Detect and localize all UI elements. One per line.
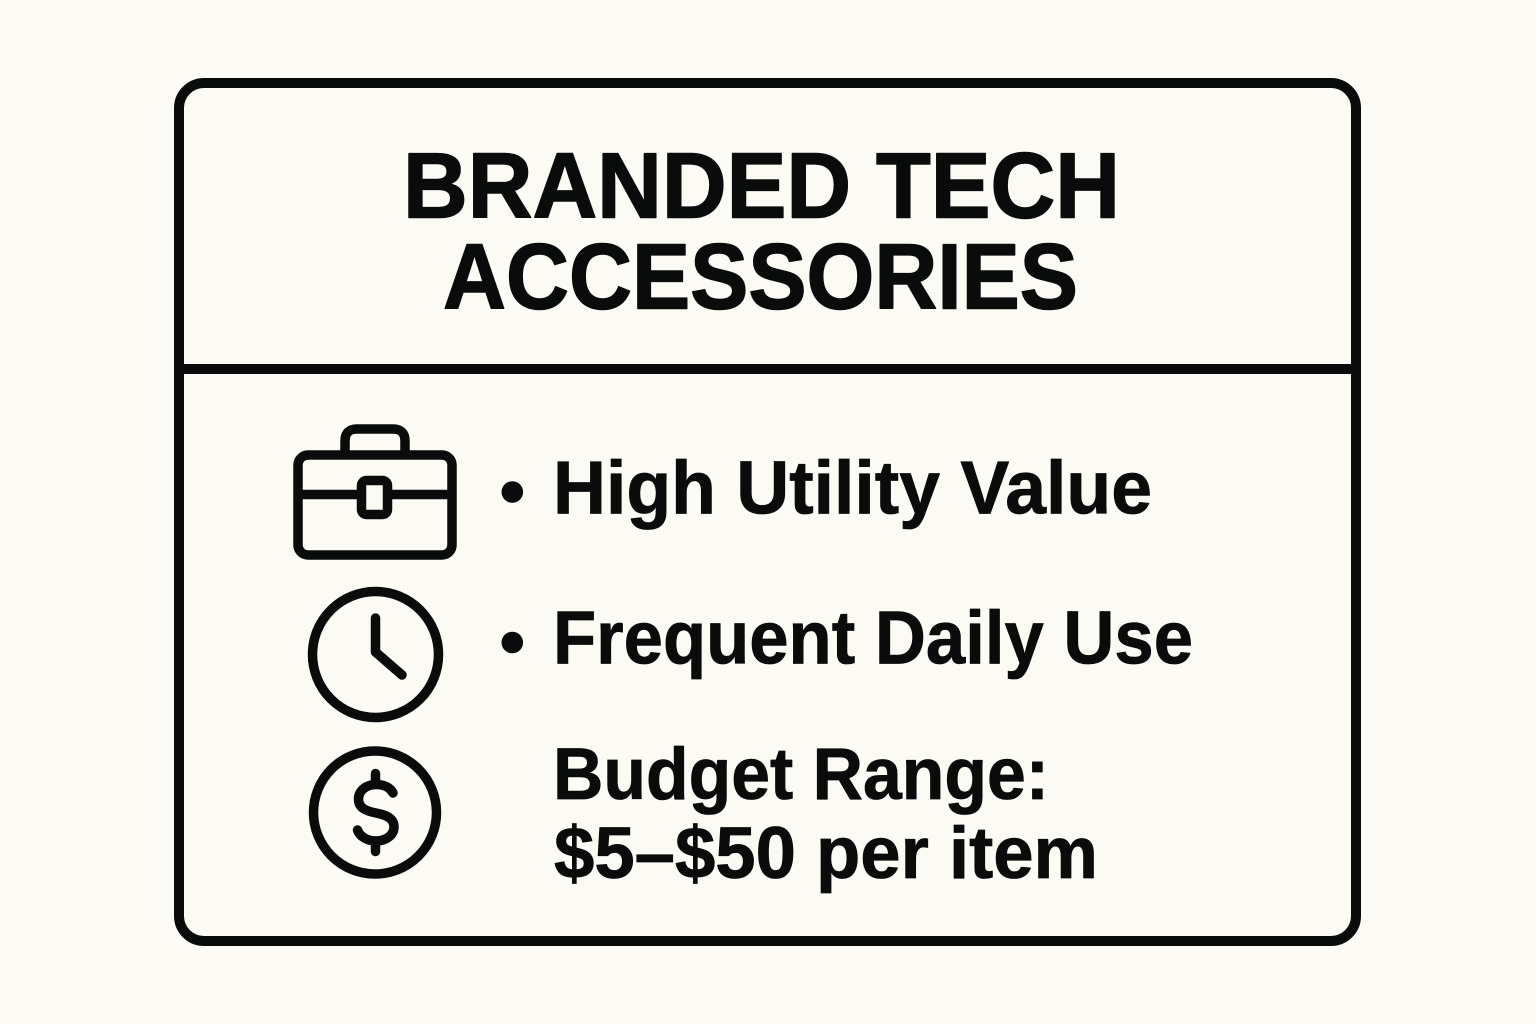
panel: card xyxy=(179,83,1356,941)
text: budget range xyxy=(553,734,1098,894)
icon: clock xyxy=(312,592,438,718)
icon: briefcase xyxy=(298,429,452,555)
bullet: high utility value: High Utility Value xyxy=(553,446,1152,530)
title xyxy=(403,134,1120,328)
text: budget range: $5–$50 per item xyxy=(554,813,1098,894)
icon: dollar coin xyxy=(314,751,436,874)
title: BRANDED TECH xyxy=(403,134,1120,238)
text: budget range: Budget Range: xyxy=(553,734,1049,815)
title: ACCESSORIES xyxy=(443,224,1078,328)
bullet: frequent daily use: Frequent Daily Use xyxy=(553,596,1193,680)
